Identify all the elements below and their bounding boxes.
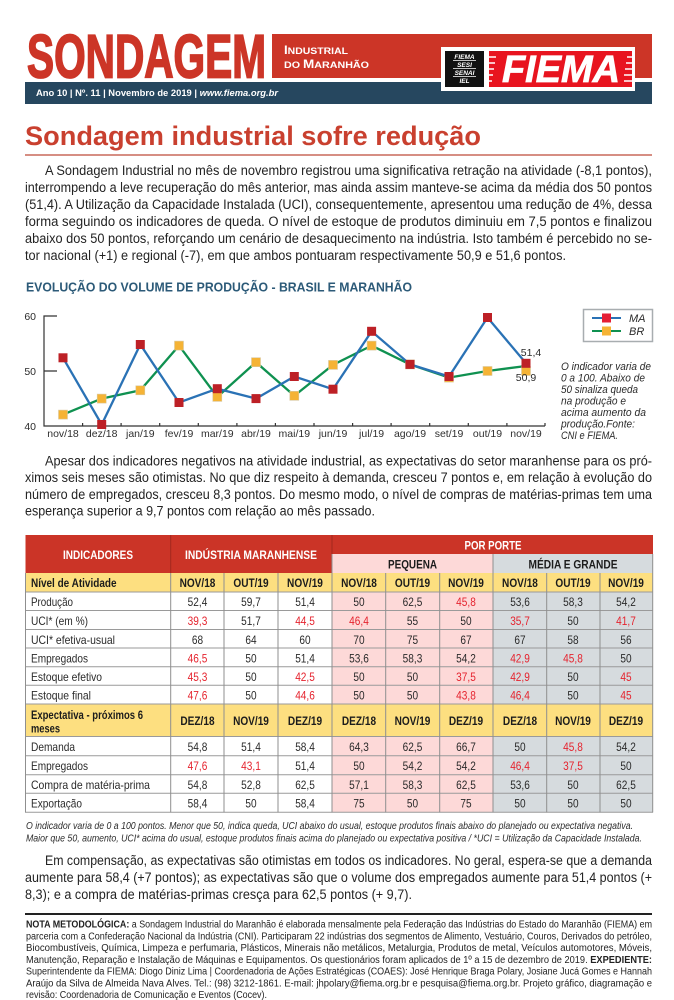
chart note bbox=[560, 361, 651, 442]
row: UCI efetiva-usual: 75 bbox=[407, 634, 418, 647]
masthead subtitle: DO MARANHÃO bbox=[284, 57, 369, 71]
x axis labels: fev/19 bbox=[165, 428, 193, 440]
row: Compra de matéria-prima: 50 bbox=[567, 779, 579, 792]
row: Demanda: 51,4 bbox=[241, 741, 261, 754]
main heading: Sondagem industrial sofre redução bbox=[25, 121, 481, 151]
second paragraph: Apesar dos indicadores negativos na atividade industrial, as expectativas do setor maranhense para os pró- bbox=[45, 454, 652, 468]
row: Exportação: 50 bbox=[514, 798, 526, 811]
chart note: O indicador varia de bbox=[561, 361, 651, 373]
closing paragraph: 8,3); e a compra de matérias-primas cresça para 62,5 pontos (+ 9,7). bbox=[25, 887, 412, 902]
row: Empregados expectativa: 54,2 bbox=[456, 760, 476, 773]
row: UCI efetiva-usual: 67 bbox=[460, 634, 472, 647]
row: UCI efetiva-usual: 67 bbox=[514, 634, 526, 647]
masthead subtitle: INDUSTRIAL bbox=[284, 43, 348, 57]
table subheader: PEQUENA bbox=[388, 558, 437, 572]
x axis labels: out/19 bbox=[473, 428, 502, 440]
x axis labels: nov/19 bbox=[510, 428, 542, 440]
row: Exportação: 50 bbox=[407, 798, 418, 811]
row: Compra de matéria-prima: 62,5 bbox=[456, 779, 476, 792]
x axis labels: ago/19 bbox=[394, 428, 426, 440]
header red band bbox=[272, 34, 652, 78]
x axis labels: mar/19 bbox=[201, 428, 234, 440]
row: Produção: 52,4 bbox=[188, 596, 207, 609]
row: UCI efetiva-usual bbox=[31, 633, 632, 647]
table header red: INDICADORES bbox=[63, 550, 133, 562]
row: Produção: 50 bbox=[353, 596, 365, 609]
methodology note bbox=[26, 918, 652, 1000]
row: Produção: 58,3 bbox=[563, 596, 583, 609]
header blue band bbox=[25, 82, 652, 104]
row: UCI em %: 44,5 bbox=[295, 615, 315, 628]
row: Produção: 54,2 bbox=[616, 596, 636, 609]
logo: FIEMA: IEL bbox=[459, 78, 470, 85]
yellow row: atividade: Nível de Atividade bbox=[31, 576, 117, 590]
row: UCI em %: 50 bbox=[460, 615, 472, 628]
row: Demanda bbox=[31, 740, 636, 754]
yellow row: atividade: OUT/19 bbox=[233, 577, 269, 590]
row: Empregados expectativa: 46,4 bbox=[510, 760, 530, 773]
row: UCI efetiva-usual: 68 bbox=[192, 634, 203, 647]
masthead title: SONDAGEM bbox=[27, 22, 266, 90]
methodology note: Manutenção, Reparação e Instalação de Máquinas e Equipamentos. Os questionários foram aplicados de 1º a 15 de dezembro de 2019. EXPEDIENTE: bbox=[26, 955, 652, 966]
yellow row: expectativa: DEZ/19 bbox=[288, 715, 322, 728]
row: Demanda: 66,7 bbox=[456, 741, 476, 754]
row: Exportação: Exportação bbox=[31, 796, 82, 810]
row: Exportação: 50 bbox=[620, 798, 632, 811]
data labels bbox=[516, 347, 541, 384]
row: Estoque efetivo: 50 bbox=[245, 671, 257, 684]
x axis labels: mai/19 bbox=[279, 428, 310, 440]
row: Compra de matéria-prima: 52,8 bbox=[241, 779, 261, 792]
row: UCI efetiva-usual: UCI* efetiva-usual bbox=[31, 633, 115, 647]
x axis labels: jul/19 bbox=[358, 428, 384, 440]
chart note: na produção e bbox=[561, 396, 626, 408]
row: Empregados expectativa: 54,2 bbox=[403, 760, 422, 773]
chart note: produção.Fonte: bbox=[560, 418, 635, 430]
row: Empregados: 50 bbox=[245, 653, 257, 666]
row: Empregados expectativa: 50 bbox=[353, 760, 365, 773]
intro paragraph: abaixo dos 50 pontos, reforçando um cenário de desaquecimento na indústria. Isto também é percebido no se- bbox=[25, 231, 652, 246]
row: Compra de matéria-prima: 62,5 bbox=[616, 779, 636, 792]
row: Compra de matéria-prima: 58,3 bbox=[403, 779, 422, 792]
row: Compra de matéria-prima: 57,1 bbox=[349, 779, 369, 792]
row: Empregados: 51,4 bbox=[295, 653, 315, 666]
row: Empregados expectativa: 37,5 bbox=[563, 760, 583, 773]
chart note: CNI e FIEMA. bbox=[561, 430, 618, 442]
row: Estoque efetivo: 50 bbox=[407, 671, 418, 684]
yellow row: expectativa: DEZ/19 bbox=[609, 715, 643, 728]
row: Produção: 62,5 bbox=[403, 596, 422, 609]
row: Estoque final: 50 bbox=[245, 690, 257, 703]
row: Produção bbox=[31, 595, 636, 609]
line chart bbox=[24, 311, 545, 440]
yellow row: expectativa: NOV/19 bbox=[395, 715, 430, 728]
row: UCI em %: 51,7 bbox=[241, 615, 261, 628]
row: Estoque efetivo: 45,3 bbox=[188, 671, 207, 684]
row: UCI efetiva-usual: 64 bbox=[245, 634, 257, 647]
logo: FIEMA: SENAI bbox=[455, 70, 475, 77]
second paragraph: esperança superior a 9,7 pontos com relação ao mês passado. bbox=[25, 504, 375, 518]
masthead bbox=[25, 22, 652, 104]
row: Estoque efetivo: 50 bbox=[353, 671, 365, 684]
chart note: acima aumento da bbox=[561, 407, 646, 419]
chart note: 50 sinaliza queda bbox=[561, 384, 638, 396]
x axis labels: abr/19 bbox=[241, 428, 271, 440]
x axis labels bbox=[47, 428, 542, 440]
row: Produção: 59,7 bbox=[241, 596, 261, 609]
data table bbox=[25, 535, 653, 812]
chart axes bbox=[44, 316, 545, 426]
row: Compra de matéria-prima: 62,5 bbox=[295, 779, 315, 792]
methodology note: Araújo da Silva de Almeida Nava Alves. Tel.: (98) 3212-1861. E-mail: jhpolary@fiema.org.br e pesquisa@fiema.org.br. Projeto gráfico, diagramação e bbox=[26, 978, 652, 990]
intro paragraph: forma seguindo os indicadores de queda. O nível de estoque de produtos diminuiu em 7,5 pontos e finalizou bbox=[25, 214, 652, 229]
second paragraph: ximos seis meses são otimistas. No que diz respeito à demanda, cresceu 7 pontos e, em relação à evolução do bbox=[25, 470, 652, 485]
row: Estoque efetivo: 37,5 bbox=[456, 671, 476, 684]
table header red: INDÚSTRIA MARANHENSE bbox=[185, 549, 317, 562]
x axis labels: jan/19 bbox=[125, 428, 155, 440]
yellow row: atividade: NOV/18 bbox=[502, 577, 538, 590]
row: Demanda: Demanda bbox=[31, 740, 75, 754]
y axis labels: 40 bbox=[24, 421, 36, 433]
row: Exportação: 75 bbox=[353, 798, 365, 811]
table header red: POR PORTE bbox=[464, 540, 522, 552]
row: Exportação: 58,4 bbox=[295, 798, 315, 811]
closing paragraph bbox=[25, 853, 652, 902]
logo: FIEMA: FIEMA bbox=[502, 49, 620, 91]
row: Compra de matéria-prima: 54,8 bbox=[188, 779, 207, 792]
methodology note: Biocombustíveis, Química, Limpeza e perfumaria, Plásticos, Minerais não metálicos, Metalurgia, Produtos de metal, Veículos automotores, Móveis, bbox=[26, 943, 652, 954]
row: Exportação: 50 bbox=[245, 798, 257, 811]
legend bbox=[584, 310, 652, 342]
table backgrounds bbox=[26, 592, 332, 812]
row: UCI efetiva-usual: 70 bbox=[353, 634, 365, 647]
x axis labels: nov/18 bbox=[47, 428, 79, 440]
chart heading: EVOLUÇÃO DO VOLUME DE PRODUÇÃO - BRASIL E MARANHÃO bbox=[26, 280, 412, 294]
y axis labels: 50 bbox=[24, 366, 36, 378]
intro paragraph: (51,4). A Utilização da Capacidade Instalada (UCI), consequentemente, apresentou uma redução de 4%, dessa bbox=[25, 197, 652, 212]
row: UCI em % bbox=[31, 614, 636, 628]
y axis labels: 60 bbox=[24, 311, 36, 323]
row: Demanda: 54,2 bbox=[616, 741, 636, 754]
row: Estoque final: Estoque final bbox=[31, 688, 91, 702]
yellow row: atividade: NOV/19 bbox=[287, 577, 323, 590]
row: Estoque efetivo bbox=[31, 670, 632, 684]
chart note: 0 a 100. Abaixo de bbox=[561, 372, 645, 384]
yellow row: expectativa: meses bbox=[31, 722, 60, 736]
row: Compra de matéria-prima: Compra de matéria-prima bbox=[31, 778, 150, 792]
row: Estoque efetivo: Estoque efetivo bbox=[31, 670, 102, 684]
yellow row: expectativa: NOV/19 bbox=[233, 715, 269, 728]
yellow row: atividade: NOV/18 bbox=[180, 577, 215, 590]
yellow row: expectativa: NOV/19 bbox=[555, 715, 591, 728]
row: Estoque efetivo: 42,5 bbox=[295, 671, 315, 684]
legend: MA bbox=[629, 313, 646, 325]
table footnote bbox=[26, 821, 642, 844]
row: Empregados: 50 bbox=[620, 653, 632, 666]
yellow row: expectativa: DEZ/19 bbox=[449, 715, 483, 728]
row: Estoque efetivo: 50 bbox=[567, 671, 579, 684]
row: Empregados: Empregados bbox=[31, 652, 88, 666]
intro paragraph: A Sondagem Industrial no mês de novembro registrou uma significativa retração na atividade (-8,1 pontos), bbox=[45, 163, 652, 178]
x axis labels: jun/19 bbox=[318, 428, 347, 440]
intro paragraph: tor nacional (+1) e regional (-7), em que ambos pontuaram respectivamente 50,9 e 51,6 pontos. bbox=[25, 248, 566, 263]
yellow row: expectativa: DEZ/18 bbox=[503, 715, 537, 728]
yellow row: atividade: NOV/19 bbox=[608, 577, 644, 590]
yellow row: atividade: OUT/19 bbox=[555, 577, 591, 590]
yellow row: expectativa: DEZ/18 bbox=[342, 715, 376, 728]
row: Estoque final: 50 bbox=[567, 690, 579, 703]
logo: FIEMA: SESI bbox=[457, 62, 472, 69]
issue line: Ano 10 | Nº. 11 | Novembro de 2019 | www.fiema.org.br bbox=[36, 88, 279, 99]
row: UCI em %: 41,7 bbox=[616, 615, 636, 628]
row: Empregados bbox=[31, 652, 632, 666]
row: Demanda: 54,8 bbox=[188, 741, 207, 754]
second paragraph bbox=[25, 454, 652, 518]
row: Estoque final: 44,6 bbox=[295, 690, 315, 703]
row: UCI em %: 46,4 bbox=[349, 615, 369, 628]
yellow row: atividade: NOV/18 bbox=[341, 577, 377, 590]
row: Produção: 45,8 bbox=[456, 596, 476, 609]
masthead subtitle bbox=[284, 43, 369, 71]
logo: FIEMA bbox=[441, 47, 635, 91]
row: Empregados expectativa: 50 bbox=[620, 760, 632, 773]
yellow row: expectativa bbox=[26, 704, 653, 736]
y axis labels bbox=[24, 311, 36, 433]
row: Demanda: 62,5 bbox=[403, 741, 422, 754]
data labels: 51,4 bbox=[521, 347, 541, 359]
row: Empregados expectativa: 47,6 bbox=[188, 760, 207, 773]
row: Produção: 51,4 bbox=[295, 596, 315, 609]
x axis labels: dez/18 bbox=[86, 428, 118, 440]
row: Empregados: 54,2 bbox=[456, 653, 476, 666]
row: Demanda: 50 bbox=[514, 741, 526, 754]
row: Empregados: 42,9 bbox=[510, 653, 530, 666]
row: Compra de matéria-prima: 53,6 bbox=[510, 779, 530, 792]
data labels: 50,9 bbox=[516, 372, 536, 384]
row: UCI em %: 35,7 bbox=[510, 615, 530, 628]
table subheader: MÉDIA E GRANDE bbox=[528, 556, 618, 572]
row: Exportação: 75 bbox=[460, 798, 472, 811]
row: Estoque efetivo: 45 bbox=[620, 671, 632, 684]
row: UCI em %: 55 bbox=[407, 615, 418, 628]
row: Empregados: 46,5 bbox=[188, 653, 207, 666]
row: Demanda: 58,4 bbox=[295, 741, 315, 754]
row: Demanda: 45,8 bbox=[563, 741, 583, 754]
row: UCI em %: UCI* (em %) bbox=[31, 614, 88, 628]
row: Empregados expectativa: 43,1 bbox=[241, 760, 261, 773]
table subheader bbox=[388, 556, 618, 572]
row: Demanda: 64,3 bbox=[349, 741, 369, 754]
row: Estoque final bbox=[31, 688, 632, 703]
row: UCI em %: 50 bbox=[567, 615, 579, 628]
row: Empregados expectativa bbox=[31, 759, 632, 773]
row: Estoque final: 50 bbox=[353, 690, 365, 703]
logo: FIEMA: FIEMA bbox=[454, 54, 475, 61]
row: UCI efetiva-usual: 56 bbox=[620, 634, 632, 647]
row: Exportação: 50 bbox=[567, 798, 579, 811]
row: Estoque efetivo: 42,9 bbox=[510, 671, 530, 684]
table header red bbox=[26, 535, 653, 573]
row: Estoque final: 45 bbox=[620, 690, 632, 703]
row: Exportação: 58,4 bbox=[188, 798, 207, 811]
row: Produção: 53,6 bbox=[510, 596, 530, 609]
series: BR bbox=[58, 341, 530, 419]
row: UCI em %: 39,3 bbox=[188, 615, 207, 628]
row: Estoque final: 50 bbox=[407, 690, 418, 703]
row: Estoque final: 47,6 bbox=[188, 690, 207, 703]
row: Compra de matéria-prima bbox=[31, 778, 636, 792]
row: UCI efetiva-usual: 60 bbox=[299, 634, 311, 647]
legend: BR bbox=[629, 326, 644, 338]
x axis labels: set/19 bbox=[435, 428, 463, 440]
row: Exportação bbox=[31, 796, 632, 811]
row: Empregados: 58,3 bbox=[403, 653, 422, 666]
row: Produção: Produção bbox=[31, 595, 73, 609]
row: Estoque final: 43,8 bbox=[456, 690, 476, 703]
yellow row: atividade bbox=[26, 573, 653, 592]
intro paragraph bbox=[25, 163, 652, 263]
series: MA bbox=[58, 313, 530, 429]
row: Empregados: 53,6 bbox=[349, 653, 369, 666]
row: UCI efetiva-usual: 58 bbox=[567, 634, 579, 647]
yellow row: atividade: NOV/19 bbox=[448, 577, 484, 590]
row: Empregados: 45,8 bbox=[563, 653, 583, 666]
yellow row: expectativa: DEZ/18 bbox=[180, 715, 215, 728]
row: Estoque final: 46,4 bbox=[510, 690, 530, 703]
row: Empregados expectativa: 51,4 bbox=[295, 760, 315, 773]
row: Empregados expectativa: Empregados bbox=[31, 759, 88, 773]
yellow row: atividade: OUT/19 bbox=[395, 577, 430, 590]
yellow row: expectativa: Expectativa - próximos 6 bbox=[31, 708, 143, 722]
